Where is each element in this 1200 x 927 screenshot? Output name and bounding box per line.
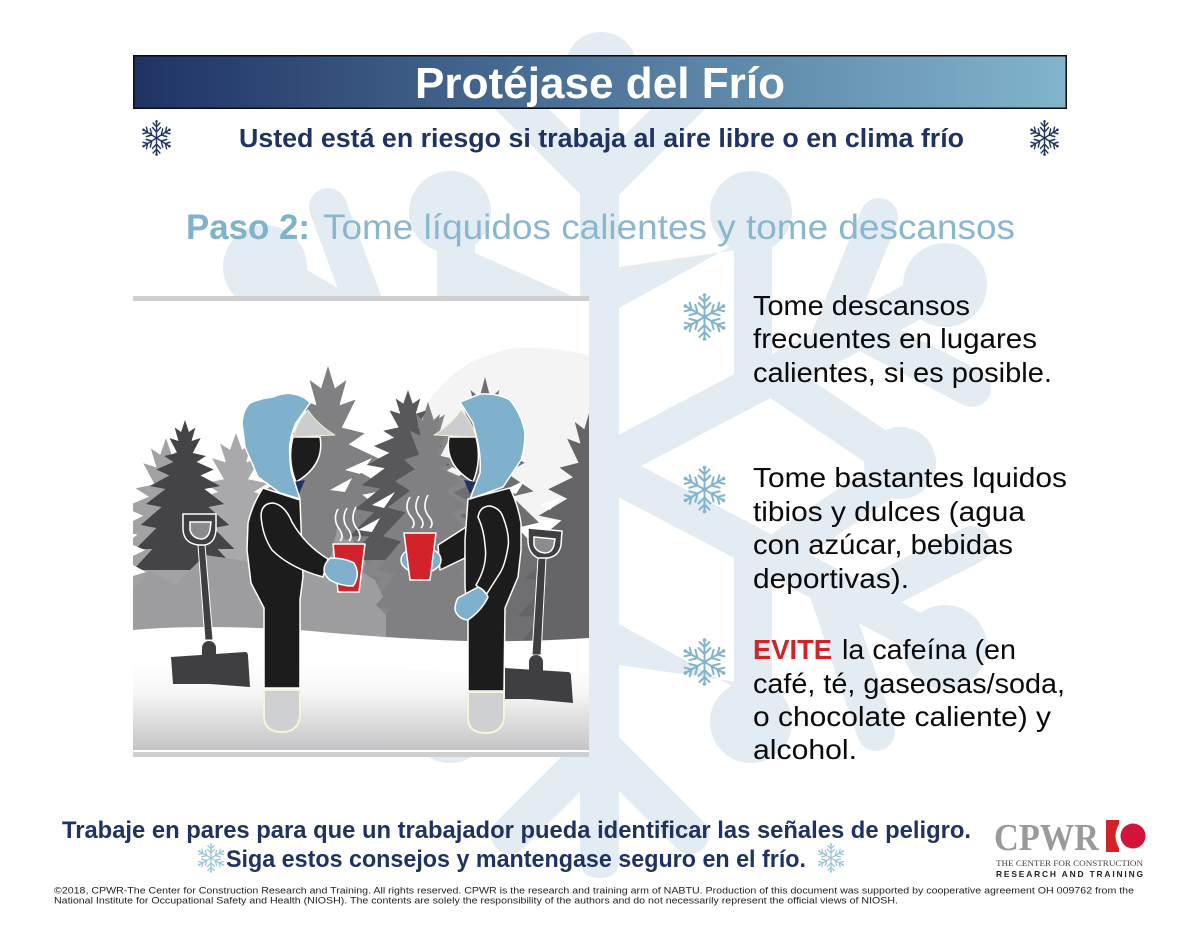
- text block: breaks: calientes, si es posible.: [753, 357, 1052, 388]
- face: [448, 437, 478, 482]
- logo: CPWR: THE CENTER FOR CONSTRUCTION: [996, 858, 1144, 868]
- icon: navy snowflake left: [140, 120, 173, 156]
- boot: [468, 692, 504, 733]
- closing message line 2: Siga estos consejos y mantengase seguro en el frío.: [226, 846, 806, 873]
- mitten: [324, 558, 357, 586]
- winter forest scene: [133, 348, 589, 750]
- boot: [264, 690, 300, 732]
- red cup: [333, 544, 365, 592]
- body: [465, 488, 521, 691]
- copyright notice: [54, 886, 1134, 906]
- hard hat: [293, 410, 335, 437]
- far arm: [438, 527, 466, 570]
- collar: [464, 480, 476, 494]
- hood: [242, 393, 310, 499]
- far mitten: [401, 547, 441, 573]
- copyright notice: National Institute for Occupational Safety and Health (NIOSH). The contents are solely the responsibility of the authors and do not necessarily represent the official views of NIOSH.: [54, 896, 898, 906]
- hood: [460, 394, 525, 499]
- text block: avoid caffeine: café, té, gaseosas/soda,: [753, 668, 1065, 699]
- icon: navy snowflake right: [1028, 120, 1061, 156]
- collar: [293, 480, 305, 494]
- text block: liquids: tibios y dulces (agua: [753, 496, 1026, 527]
- step heading: Paso 2:: [186, 208, 310, 247]
- text block: breaks: [753, 290, 1052, 388]
- near arm: [476, 506, 508, 595]
- logo: CPWR: [994, 817, 1146, 879]
- steam: [335, 507, 360, 541]
- arm: [261, 503, 328, 577]
- right worker: [401, 394, 525, 733]
- logo: CPWR: CPWR: [994, 817, 1099, 859]
- text block: liquids: deportivas).: [753, 563, 909, 594]
- text block: avoid caffeine: o chocolate caliente) y: [753, 701, 1051, 732]
- left worker: [242, 393, 365, 732]
- copyright notice: ©2018, CPWR-The Center for Construction Research and Training. All rights reserved. CPWR is the research and training arm of NABTU. Production of this document was supported by cooperative agreement OH 009762 from the: [54, 886, 1134, 896]
- icon: footer snowflake right: [816, 843, 846, 873]
- icon: blue snowflake, caffeine: [681, 638, 728, 686]
- subtitle: Usted está en riesgo si trabaja al aire libre o en clima frío: [239, 125, 964, 153]
- step heading: Tome líquidos calientes y tome descansos: [323, 208, 1015, 247]
- red cup: [404, 533, 436, 580]
- face: [291, 437, 321, 482]
- body: [247, 488, 303, 688]
- illustration panel: two workers drinking hot beverages: [133, 296, 589, 757]
- text block: avoid caffeine: alcohol.: [753, 734, 857, 765]
- background: giant pale snowflake: [223, 32, 987, 878]
- icon: blue snowflake, liquids: [681, 466, 728, 513]
- near mitten: [455, 587, 488, 620]
- text block: avoid caffeine: EVITE: [753, 634, 832, 665]
- right shovel: [505, 528, 573, 703]
- logo: CPWR: RESEARCH AND TRAINING: [996, 869, 1143, 879]
- steam: [407, 495, 432, 528]
- text block: liquids: con azúcar, bebidas: [753, 529, 1013, 560]
- title bar: [134, 56, 1066, 108]
- text block: liquids: Tome bastantes lquidos: [753, 462, 1067, 493]
- icon: blue snowflake, breaks: [681, 293, 728, 341]
- text block: avoid caffeine: [753, 634, 1065, 765]
- text block: liquids: [753, 462, 1067, 594]
- icon: footer snowflake left: [196, 843, 226, 873]
- hard hat: [434, 410, 476, 437]
- closing message line 1: Trabaje en pares para que un trabajador pueda identificar las señales de peligro.: [62, 817, 971, 844]
- title text: Protéjase del Frío: [415, 59, 785, 108]
- left shovel: [171, 514, 250, 687]
- text block: breaks: Tome descansos: [753, 290, 970, 321]
- text block: breaks: frecuentes en lugares: [753, 323, 1037, 354]
- text block: avoid caffeine: la cafeína (en: [842, 634, 1016, 665]
